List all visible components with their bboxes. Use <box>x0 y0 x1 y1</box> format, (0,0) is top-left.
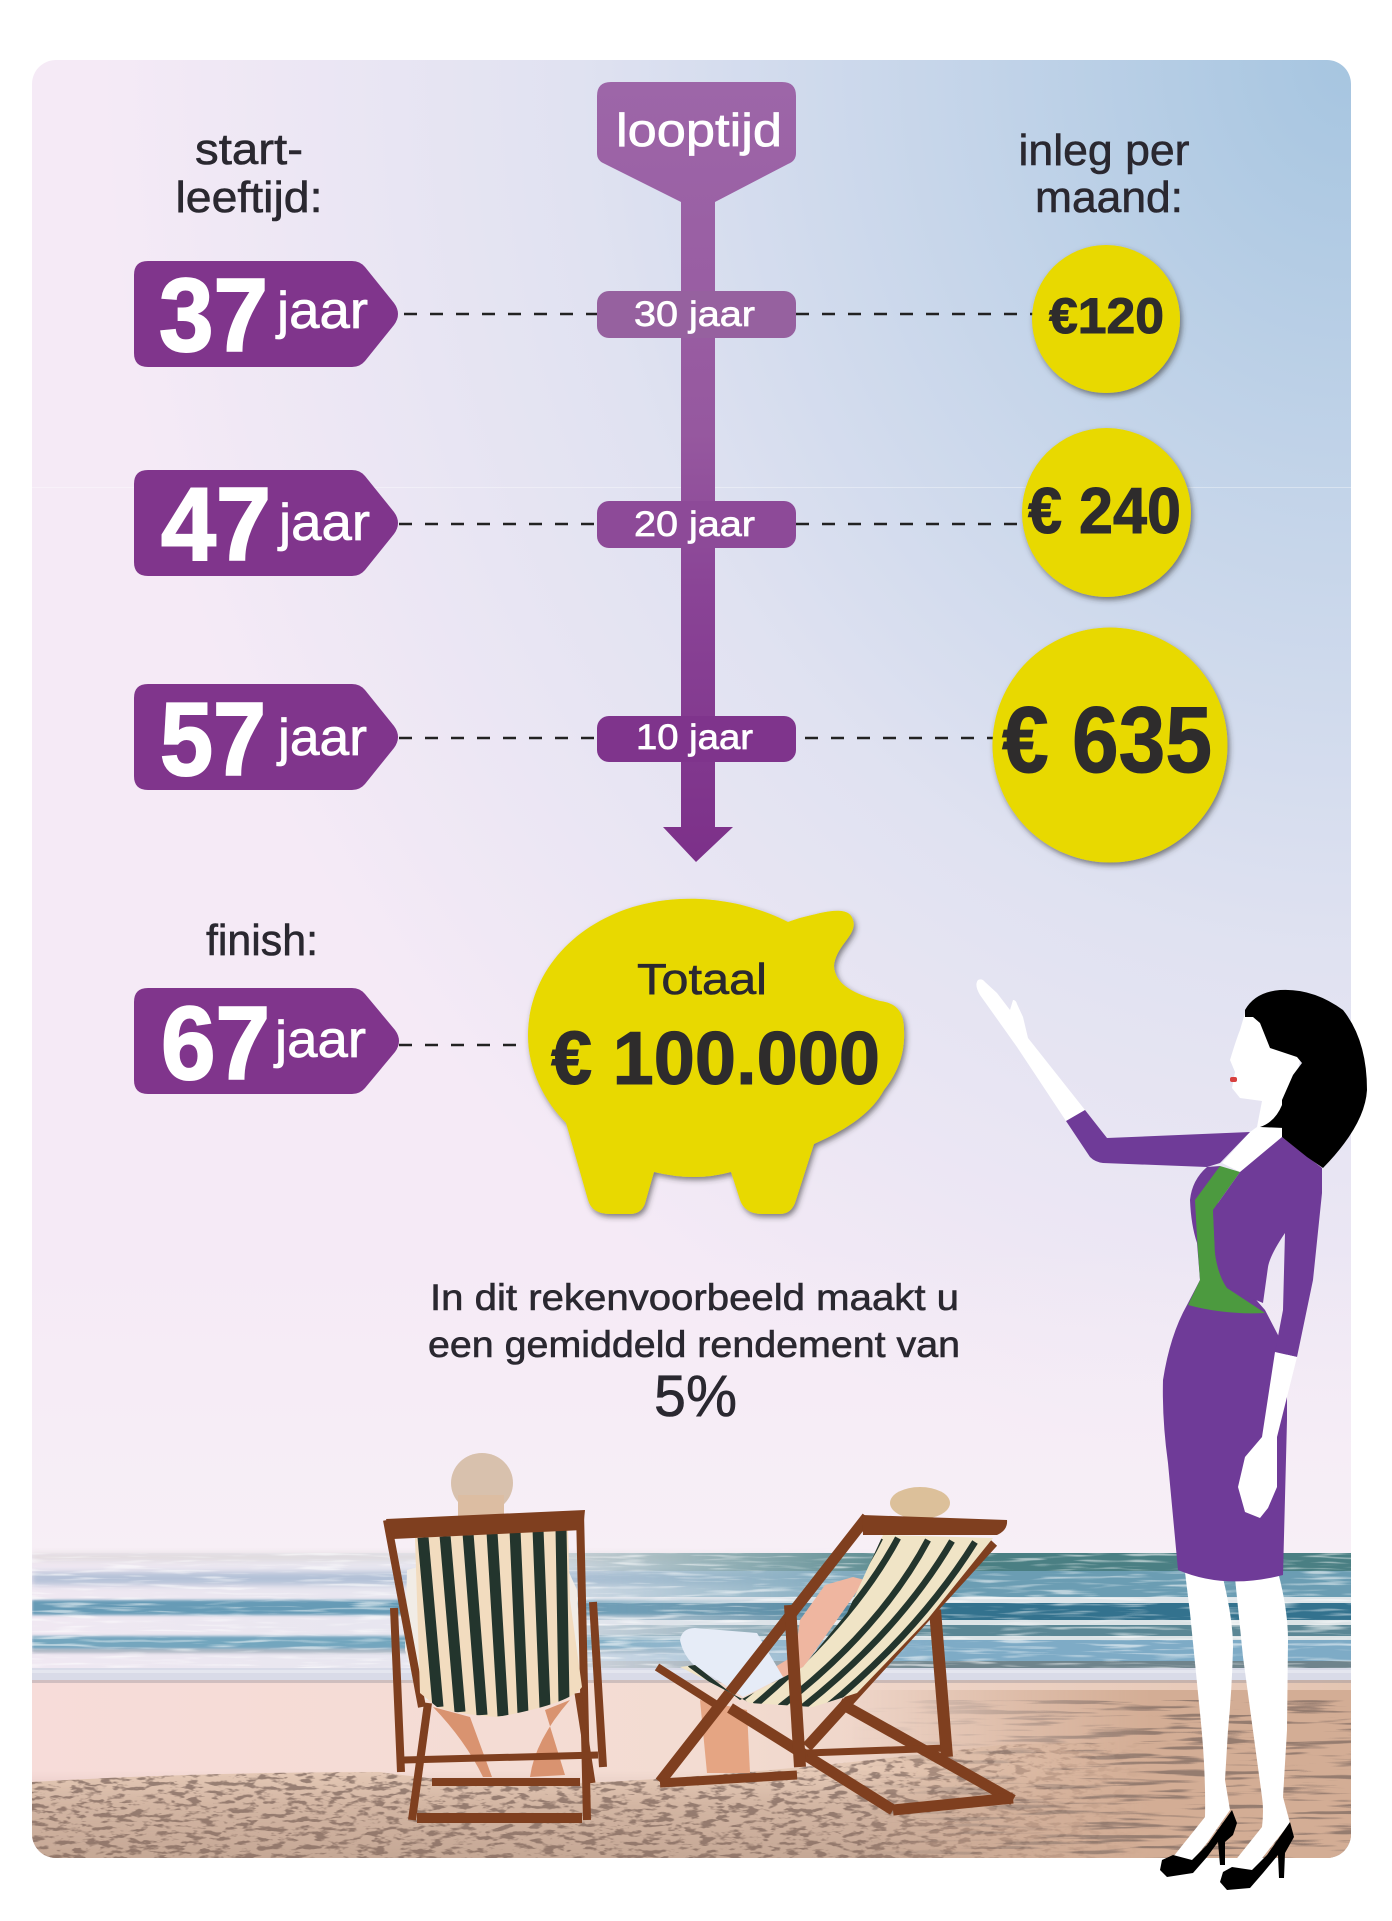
connector: 67 jaar to total <box>399 1044 522 1046</box>
pill: 20 jaar: 20 jaar <box>634 505 755 544</box>
badge: 47 jaar: jaar <box>277 494 370 552</box>
pill: 30 jaar: 30 jaar <box>634 295 755 334</box>
badge: 67 jaar <box>134 986 399 1102</box>
pill: 10 jaar: 10 jaar <box>636 718 753 757</box>
badge: 37 jaar <box>134 258 398 374</box>
pill: 20 jaar <box>597 501 796 548</box>
heading: inleg per maand: maand: <box>1035 173 1183 222</box>
badge: 47 jaar <box>134 467 398 583</box>
heading: startleeftijd <box>176 125 322 222</box>
heading: finish: finish: <box>206 916 318 965</box>
coin: 120 euro <box>1032 245 1180 393</box>
badge: 57 jaar: jaar <box>276 709 367 767</box>
shoes <box>1160 1810 1294 1890</box>
text block: average return: In dit rekenvoorbeeld maakt u <box>430 1277 959 1318</box>
right darker water <box>568 1553 1351 1668</box>
arrow: looptijd timeline: looptijd <box>616 104 782 156</box>
connector: 37 jaar to 30 jaar to 120 euro <box>404 313 1034 315</box>
piggy bank: total amount: € 100.000 <box>551 1016 880 1100</box>
pill: 30 jaar <box>597 291 796 338</box>
purple jacket and raised sleeve <box>1066 1110 1322 1357</box>
pill: 10 jaar <box>597 716 796 762</box>
left faded waves <box>32 1552 826 1654</box>
green top <box>1188 1166 1265 1313</box>
coin: 635 euro <box>992 628 1228 862</box>
heading: inleg per maand: inleg per <box>1018 126 1190 175</box>
purple skirt and left body sliver <box>1163 1166 1287 1581</box>
badge: 47 jaar: 47 <box>161 467 271 583</box>
sea <box>32 1553 1351 1683</box>
badge: 67 jaar: 67 <box>161 986 270 1102</box>
lower arm and hand <box>1238 1352 1297 1518</box>
piggy bank: total amount: Totaal <box>637 955 767 1004</box>
coin: 120 euro: €120 <box>1049 288 1164 344</box>
arrow: looptijd timeline <box>597 82 796 862</box>
badge: 57 jaar <box>134 682 398 798</box>
piggy bank: total amount <box>528 899 904 1214</box>
connector: 47 jaar to 20 jaar to 240 euro <box>399 523 1024 525</box>
lips <box>1230 1077 1237 1082</box>
text block: average return <box>428 1277 960 1429</box>
coin: 240 euro <box>1022 428 1191 597</box>
legs <box>1173 1572 1290 1870</box>
sand <box>32 1680 1351 1858</box>
raised white arm and hand <box>976 979 1085 1121</box>
badge: 37 jaar: jaar <box>275 282 368 340</box>
connector: 57 jaar to 10 jaar to 635 euro <box>399 737 995 739</box>
badge: 57 jaar: 57 <box>160 682 266 798</box>
photo: left deck chair with person <box>386 1453 603 1820</box>
hair lock at neck <box>1260 1105 1284 1128</box>
heading: startleeftijd: start- <box>195 125 303 174</box>
coin: 240 euro: € 240 <box>1028 474 1181 547</box>
face and neck <box>1222 1005 1300 1172</box>
heading: startleeftijd: leeftijd: <box>176 173 322 222</box>
hair <box>1245 990 1367 1168</box>
heading: inleg per maand <box>1018 126 1190 222</box>
coin: 635 euro: € 635 <box>1002 687 1212 792</box>
badge: 37 jaar: 37 <box>159 258 268 374</box>
text block: average return: een gemiddeld rendement van <box>428 1324 960 1365</box>
text block: average return: 5% <box>654 1364 737 1429</box>
photo: right deck chair with person <box>657 1487 1013 1810</box>
figure: woman pointing upward <box>976 979 1367 1890</box>
badge: 67 jaar: jaar <box>273 1011 366 1069</box>
